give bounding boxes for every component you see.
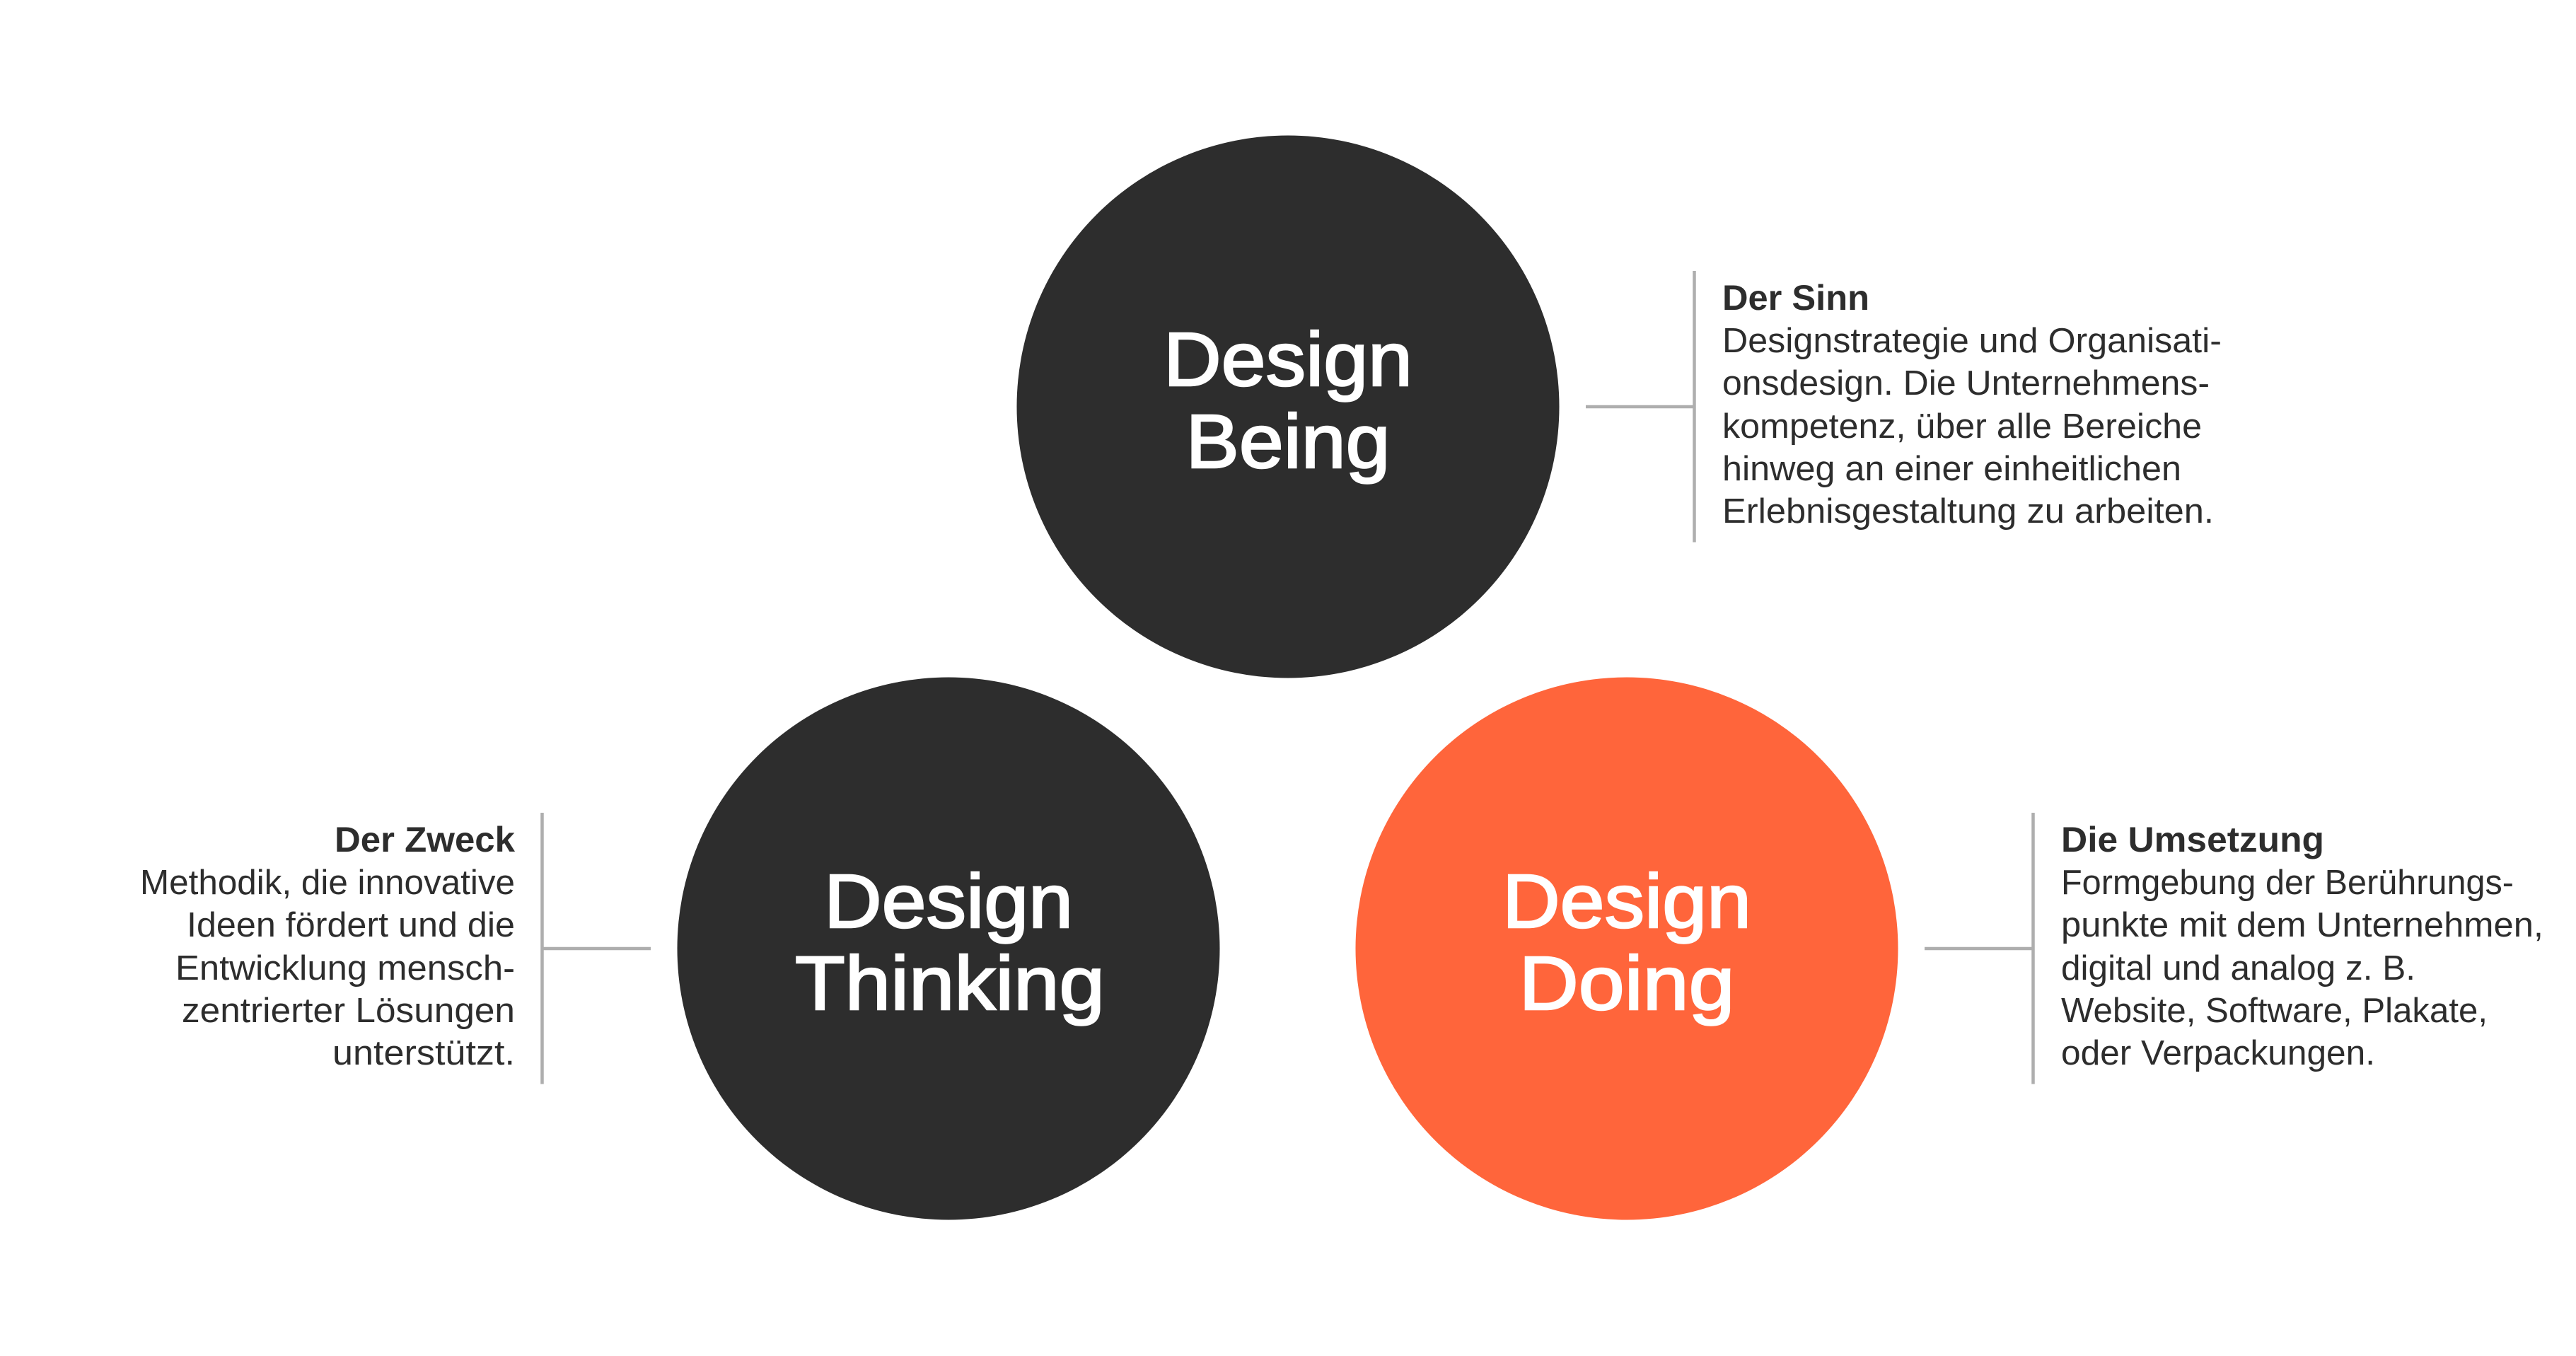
text block: Die Umsetzung: Die Umsetzung [2061,820,2324,859]
text block: Der Zweck: Entwicklung mensch- [175,949,515,987]
heading: Design Doing: Design [1502,858,1751,944]
text block: Der Zweck [140,820,515,1072]
text block: Die Umsetzung: oder Verpackungen. [2061,1034,2375,1072]
connector: Design Doing to text [1925,813,2033,1084]
heading: Design Being: Being [1185,398,1391,484]
heading: Design Thinking [795,858,1105,1026]
connector: Design Thinking to text [542,813,651,1084]
heading: Design Doing [1502,858,1751,1026]
text block: Die Umsetzung: digital und analog z. B. [2061,949,2415,987]
connector: Design Being to text [1586,271,1695,542]
text block: Der Sinn: Designstrategie und Organisati- [1722,322,2222,360]
text block: Der Sinn: hinweg an einer einheitlichen [1722,450,2181,488]
text block: Der Sinn: Der Sinn [1722,278,1869,318]
heading: Design Being [1164,316,1412,484]
text block: Der Zweck: unterstützt. [332,1034,515,1072]
heading: Design Being: Design [1164,316,1412,402]
text block: Der Sinn [1722,278,2222,531]
panel: Design Thinking circle [678,678,1219,1219]
text block: Der Zweck: zentrierter Lösungen [182,992,515,1030]
text block: Die Umsetzung: Formgebung der Berührungs- [2061,864,2514,902]
heading: Design Thinking: Design [824,858,1073,944]
heading: Design Thinking: Thinking [795,940,1105,1026]
text block: Die Umsetzung: Website, Software, Plakate, [2061,992,2488,1030]
text block: Die Umsetzung: punkte mit dem Unternehmen, [2061,906,2543,944]
text block: Der Zweck: Der Zweck [335,820,515,859]
panel: Design Being circle [1017,136,1559,678]
text block: Der Sinn: Erlebnisgestaltung zu arbeiten. [1722,492,2214,531]
text block: Der Zweck: Ideen fördert und die [187,906,515,944]
heading: Design Doing: Doing [1519,940,1734,1026]
text block: Der Zweck: Methodik, die innovative [140,864,515,902]
text block: Die Umsetzung [2061,820,2543,1072]
text block: Der Sinn: onsdesign. Die Unternehmens- [1722,364,2210,402]
panel: Design Doing circle [1355,678,1898,1219]
text block: Der Sinn: kompetenz, über alle Bereiche [1722,407,2202,446]
